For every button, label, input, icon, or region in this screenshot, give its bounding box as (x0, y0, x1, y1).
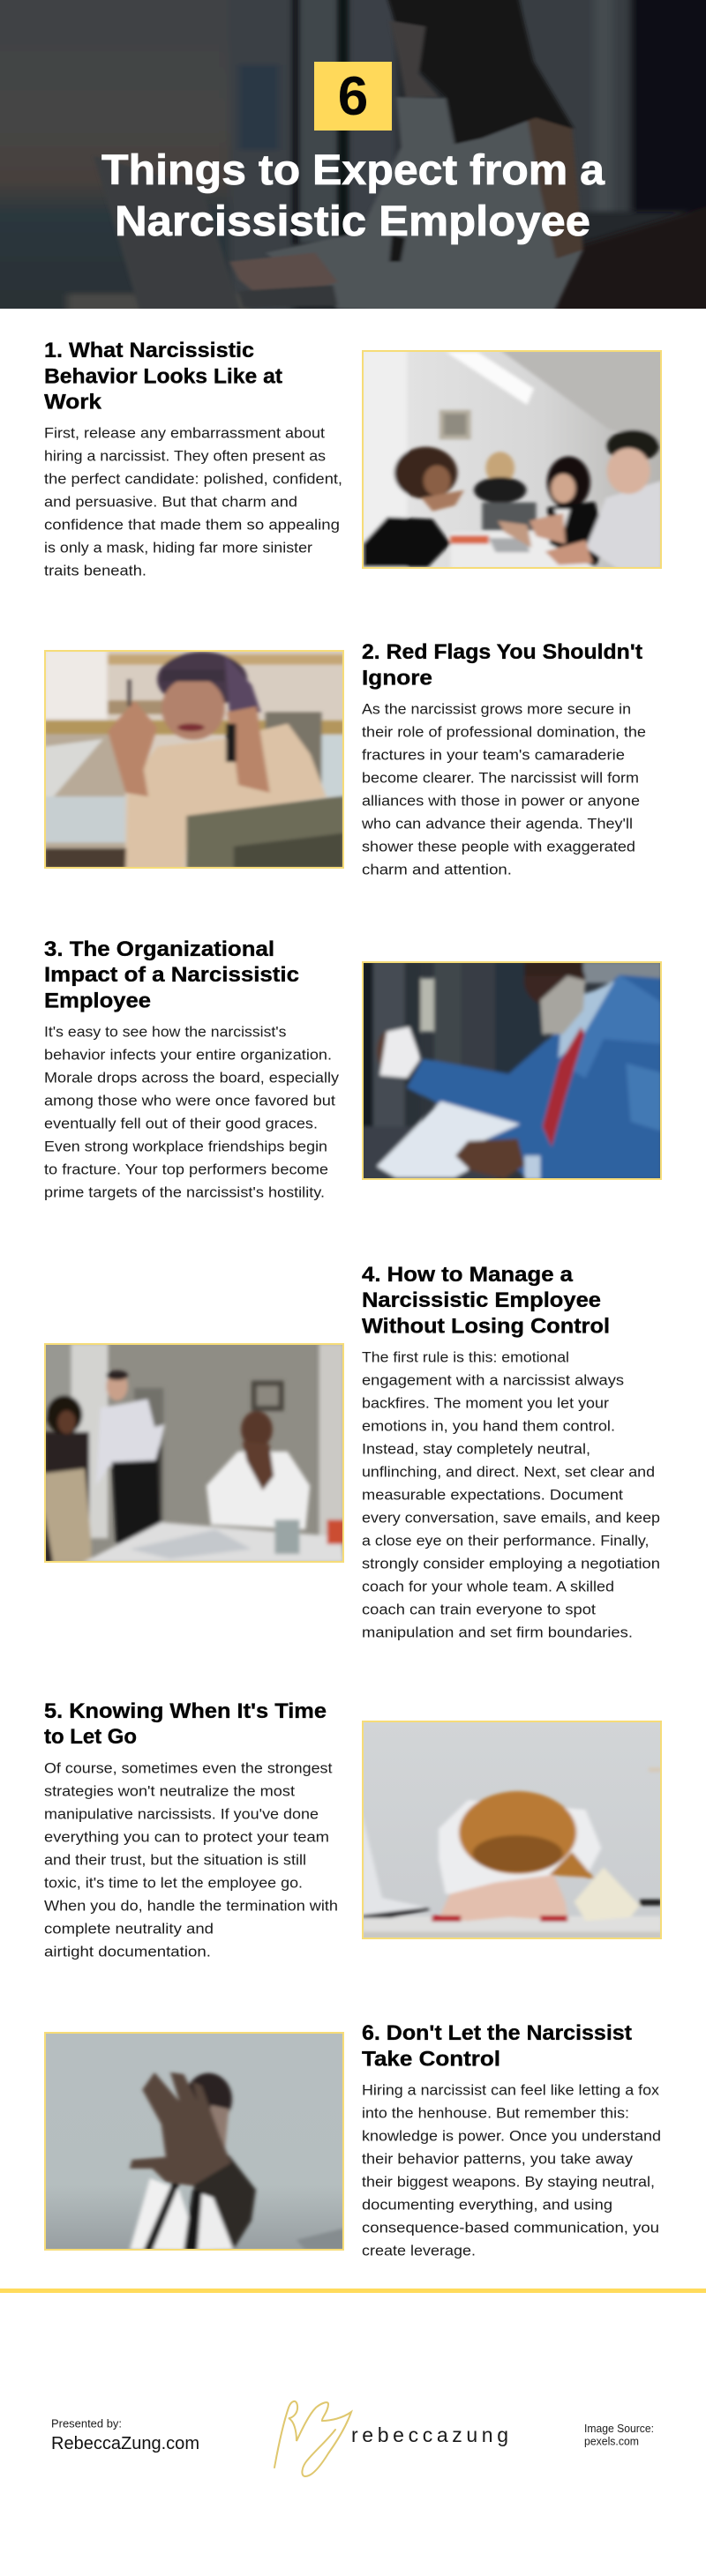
body text 5: strategies won't neutralize the most (44, 1783, 295, 1799)
body text 6: knowledge is power. Once you understand (362, 2129, 661, 2145)
body text 4: The first rule is this: emotional (362, 1349, 569, 1365)
logo: rebeccazung (351, 2423, 508, 2446)
body text 4: unflinching, and direct. Next, set clear and (362, 1464, 655, 1480)
title (101, 147, 605, 245)
section 1 (44, 339, 662, 579)
body text 4: manipulation and set firm boundaries. (362, 1624, 633, 1640)
body text 5: and their trust, but the situation is still (44, 1852, 306, 1868)
body text 1: confidence that made them so appealing (44, 517, 340, 533)
heading 6 (362, 2021, 632, 2071)
body text 2: charm and attention. (362, 862, 512, 878)
body text 4: coach for your whole team. A skilled (362, 1579, 614, 1594)
heading 1 (44, 339, 282, 414)
photo: man with hands on face and colleagues (44, 1343, 344, 1563)
body text 2: alliances with those in power or anyone (362, 794, 640, 810)
photo: woman raising hand toward camera (44, 2032, 344, 2251)
body text 5: Of course, sometimes even the strongest (44, 1760, 333, 1776)
body text 3: behavior infects your entire organization. (44, 1048, 332, 1064)
body text 1: hiring a narcissist. They often present as (44, 448, 326, 464)
heading 6: 6. Don't Let the Narcissist (362, 2021, 632, 2045)
logo (274, 2401, 508, 2476)
logo signature mark (274, 2401, 351, 2476)
body text 5: everything you can to protect your team (44, 1829, 329, 1845)
body text 4: engagement with a narcissist always (362, 1372, 624, 1388)
body text 4: strongly consider employing a negotiation (362, 1556, 660, 1572)
heading 5 (44, 1699, 327, 1749)
body text 2: shower these people with exaggerated (362, 840, 635, 855)
body text 2: fractures in your team's camaraderie (362, 748, 625, 764)
body text 4 (362, 1349, 660, 1640)
section 5 (44, 1699, 662, 1960)
heading 5: 5. Knowing When It's Time (44, 1699, 327, 1723)
body text 6: their behavior patterns, you take away (362, 2152, 634, 2168)
body text 4: coach can train everyone to spot (362, 1602, 596, 1617)
body text 4: emotions in, you hand them control. (362, 1418, 615, 1434)
photo: arguing office meeting (362, 350, 662, 569)
photo: angry man in blue suit (362, 954, 662, 1180)
image source: Image Source: (584, 2423, 654, 2435)
body text 2: become clearer. The narcissist will form (362, 771, 639, 787)
body text 5 (44, 1760, 338, 1960)
body text 1: traits beneath. (44, 563, 146, 579)
presented by (51, 2416, 199, 2453)
body text 6: their biggest weapons. By staying neutral, (362, 2175, 655, 2191)
body text 3: Morale drops across the board, especially (44, 1071, 340, 1086)
body text 5: When you do, handle the termination with (44, 1898, 338, 1914)
section 3 (44, 937, 662, 1201)
body text 3: to fracture. Your top performers become (44, 1162, 328, 1178)
body text 1: the perfect candidate: polished, confident, (44, 471, 342, 487)
heading 3: Impact of a Narcissistic (44, 963, 299, 987)
heading 5: to Let Go (44, 1725, 137, 1749)
heading 3: 3. The Organizational (44, 937, 274, 961)
body text 6: into the henhouse. But remember this: (362, 2106, 629, 2122)
heading 3: Employee (44, 989, 151, 1012)
body text 4: backfires. The moment you let your (362, 1395, 610, 1411)
heading 3 (44, 937, 299, 1012)
title: Things to Expect from a (101, 147, 605, 194)
heading 1: Behavior Looks Like at (44, 365, 282, 388)
heading 4: Narcissistic Employee (362, 1288, 601, 1312)
header banner (0, 0, 706, 317)
number badge: 6 (338, 66, 368, 127)
section 4 (44, 1263, 660, 1640)
heading 4: Without Losing Control (362, 1314, 610, 1339)
heading 2: Ignore (362, 667, 432, 690)
body text 3: eventually fell out of their good graces. (44, 1116, 318, 1132)
heading 6: Take Control (362, 2048, 500, 2071)
section 6 (44, 2021, 661, 2259)
body text 5: manipulative narcissists. If you've done (44, 1806, 319, 1822)
footer (51, 2401, 654, 2476)
body text 4: measurable expectations. Document (362, 1487, 623, 1503)
body text 6: consequence-based communication, you (362, 2221, 659, 2236)
body text 5: complete neutrality and (44, 1921, 214, 1937)
body text 2: As the narcissist grows more secure in (362, 702, 631, 718)
heading 1: 1. What Narcissistic (44, 339, 254, 362)
body text 4: a close eye on their performance. Finally, (362, 1533, 650, 1549)
body text 1: is only a mask, hiding far more sinister (44, 540, 313, 556)
body text 6: Hiring a narcissist can feel like letting a fox (362, 2083, 660, 2099)
body text 4: Instead, stay completely neutral, (362, 1441, 590, 1457)
heading 4 (362, 1263, 610, 1339)
section 2 (44, 640, 646, 878)
body text 6: documenting everything, and using (362, 2198, 612, 2214)
body text 3: Even strong workplace friendships begin (44, 1139, 327, 1155)
body text 6: create leverage. (362, 2244, 476, 2259)
body text 2: who can advance their agenda. They'll (361, 817, 633, 833)
body text 3 (44, 1025, 340, 1201)
body text 4: every conversation, save emails, and keep (362, 1510, 660, 1526)
photo: woman face-down on desk (362, 1721, 662, 1939)
body text 6 (362, 2083, 661, 2259)
heading 1: Work (44, 390, 102, 414)
body text 2 (361, 702, 646, 878)
body text 5: toxic, it's time to let the employee go. (44, 1875, 303, 1891)
body text 3: prime targets of the narcissist's hostility. (44, 1185, 325, 1201)
body text 3: among those who were once favored but (44, 1094, 335, 1109)
presented by: RebeccaZung.com (51, 2434, 199, 2453)
header photo: woman at laptop (0, 0, 706, 309)
presented by: Presented by: (51, 2416, 122, 2430)
image source: pexels.com (584, 2436, 639, 2448)
body text 1 (44, 425, 342, 579)
number badge (314, 62, 392, 131)
body text 3: It's easy to see how the narcissist's (44, 1025, 286, 1041)
body text 1: First, release any embarrassment about (44, 425, 325, 441)
body text 5: airtight documentation. (44, 1944, 211, 1960)
image source (584, 2423, 654, 2448)
body text 2: their role of professional domination, the (362, 725, 646, 741)
photo: woman on phone (44, 650, 344, 869)
title: Narcissistic Employee (115, 198, 590, 245)
body text 1: and persuasive. But that charm and (44, 494, 297, 510)
heading 2: 2. Red Flags You Shouldn't (362, 640, 642, 664)
heading 4: 4. How to Manage a (362, 1263, 574, 1287)
heading 2 (362, 640, 642, 690)
